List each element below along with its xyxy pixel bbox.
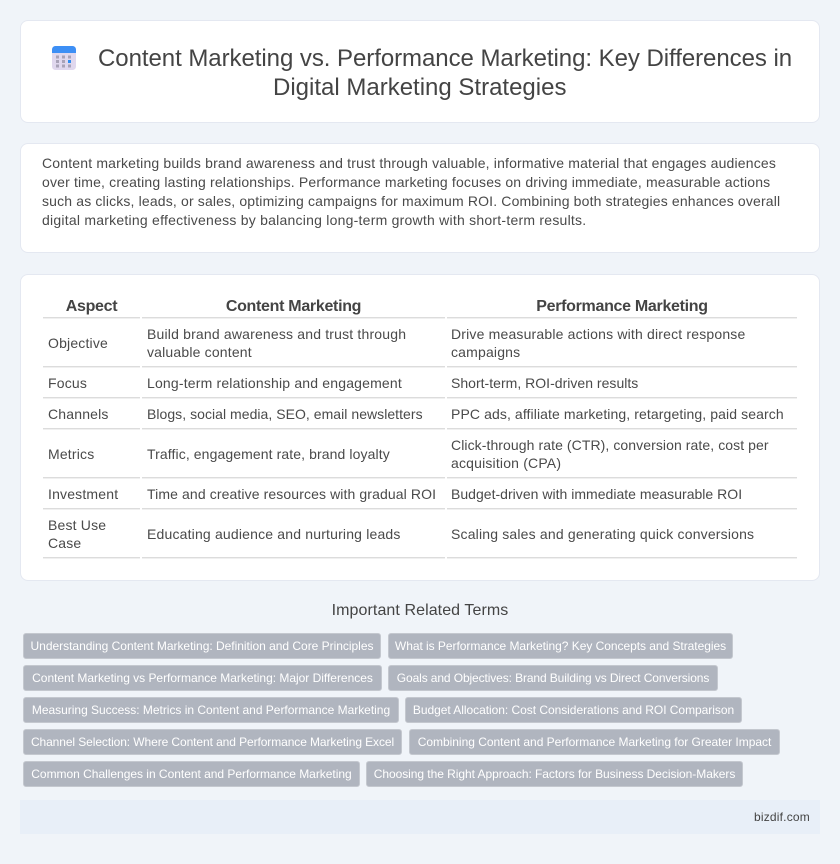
- table: header row: [66, 298, 708, 315]
- table row: best use case: Best Use: [48, 517, 106, 533]
- table row: investment: [48, 486, 742, 502]
- panel: introduction text: [20, 143, 820, 253]
- text block: introduction: over time, creating lasting relationships. Performance marketing focuses on driving immediate, measurable actions: [42, 174, 770, 190]
- table row: objective: Objective: [48, 335, 108, 351]
- tag list: related terms: Measuring Success: Metrics in Content and Performance Marketing: [32, 703, 390, 717]
- footer: source: bizdif.com: [754, 810, 810, 824]
- table row: focus: Long-term relationship and engagement: [147, 375, 402, 391]
- table row: focus: Short-term, ROI-driven results: [451, 375, 638, 391]
- table row: focus: [48, 375, 638, 391]
- tag list: related terms: Goals and Objectives: Brand Building vs Direct Conversions: [397, 671, 709, 685]
- table row: channels: Blogs, social media, SEO, email newsletters: [147, 406, 423, 422]
- tag list: related terms: Budget Allocation: Cost Considerations and ROI Comparison: [413, 703, 734, 717]
- tag list: related terms: Understanding Content Marketing: Definition and Core Principles: [31, 639, 373, 653]
- text block: introduction: such as clicks, leads, or sales, optimizing campaigns for maximum ROI. Combining both strategies enhances overall: [42, 193, 780, 209]
- table row: investment: Budget-driven with immediate measurable ROI: [451, 486, 742, 502]
- table row: channels: [48, 406, 784, 422]
- table row: objective: Build brand awareness and trust through: [147, 326, 406, 342]
- table row: investment: Investment: [48, 486, 118, 502]
- table row: objective: Drive measurable actions with direct response: [451, 326, 745, 342]
- tag list: related terms: [23, 633, 780, 787]
- table row: objective: [48, 326, 745, 360]
- table row: best use case: Case: [48, 535, 81, 551]
- tag list: related terms: Common Challenges in Content and Performance Marketing: [31, 767, 352, 781]
- text block: introduction: digital marketing effectiveness by balancing long-term growth with short-term results.: [42, 212, 586, 228]
- table: header row: Performance Marketing: [536, 298, 708, 315]
- table row: channels: PPC ads, affiliate marketing, retargeting, paid search: [451, 406, 784, 422]
- table row: channels: Channels: [48, 406, 109, 422]
- icon: calendar: [52, 46, 76, 70]
- title: Content Marketing vs. Performance Marketing: Key Differences in: [98, 45, 792, 72]
- table row: best use case: [48, 517, 754, 551]
- tag list: related terms: Combining Content and Performance Marketing for Greater Impact: [418, 735, 771, 749]
- tag list: related terms: Content Marketing vs Performance Marketing: Major Differences: [32, 671, 373, 685]
- table: header row: Aspect: [66, 298, 117, 315]
- table row: metrics: Metrics: [48, 446, 94, 462]
- title: [98, 45, 792, 101]
- footer bar: [20, 800, 820, 834]
- title: Digital Marketing Strategies: [273, 74, 566, 101]
- table row: investment: Time and creative resources with gradual ROI: [147, 486, 436, 502]
- tag list: related terms: Channel Selection: Where Content and Performance Marketing Excel: [31, 735, 394, 749]
- table row: best use case: Scaling sales and generating quick conversions: [451, 526, 754, 542]
- table row: metrics: [48, 437, 769, 471]
- panel: comparison table: [20, 274, 820, 581]
- table: header row: Content Marketing: [226, 298, 361, 315]
- table row: metrics: Click-through rate (CTR), conversion rate, cost per: [451, 437, 769, 453]
- heading: important related terms: Important Related Terms: [332, 602, 508, 619]
- table row: focus: Focus: [48, 375, 87, 391]
- text block: introduction: [42, 155, 780, 228]
- text block: introduction: Content marketing builds brand awareness and trust through valuable, informative material that engages audiences: [42, 155, 776, 171]
- table row: metrics: acquisition (CPA): [451, 455, 561, 471]
- tag list: related terms: Choosing the Right Approach: Factors for Business Decision-Makers: [374, 767, 735, 781]
- table row: metrics: Traffic, engagement rate, brand loyalty: [147, 446, 390, 462]
- table row: best use case: Educating audience and nurturing leads: [147, 526, 401, 542]
- table row: objective: valuable content: [147, 344, 252, 360]
- panel: header: [20, 20, 820, 123]
- tag list: related terms: What is Performance Marketing? Key Concepts and Strategies: [395, 639, 726, 653]
- table row: objective: campaigns: [451, 344, 520, 360]
